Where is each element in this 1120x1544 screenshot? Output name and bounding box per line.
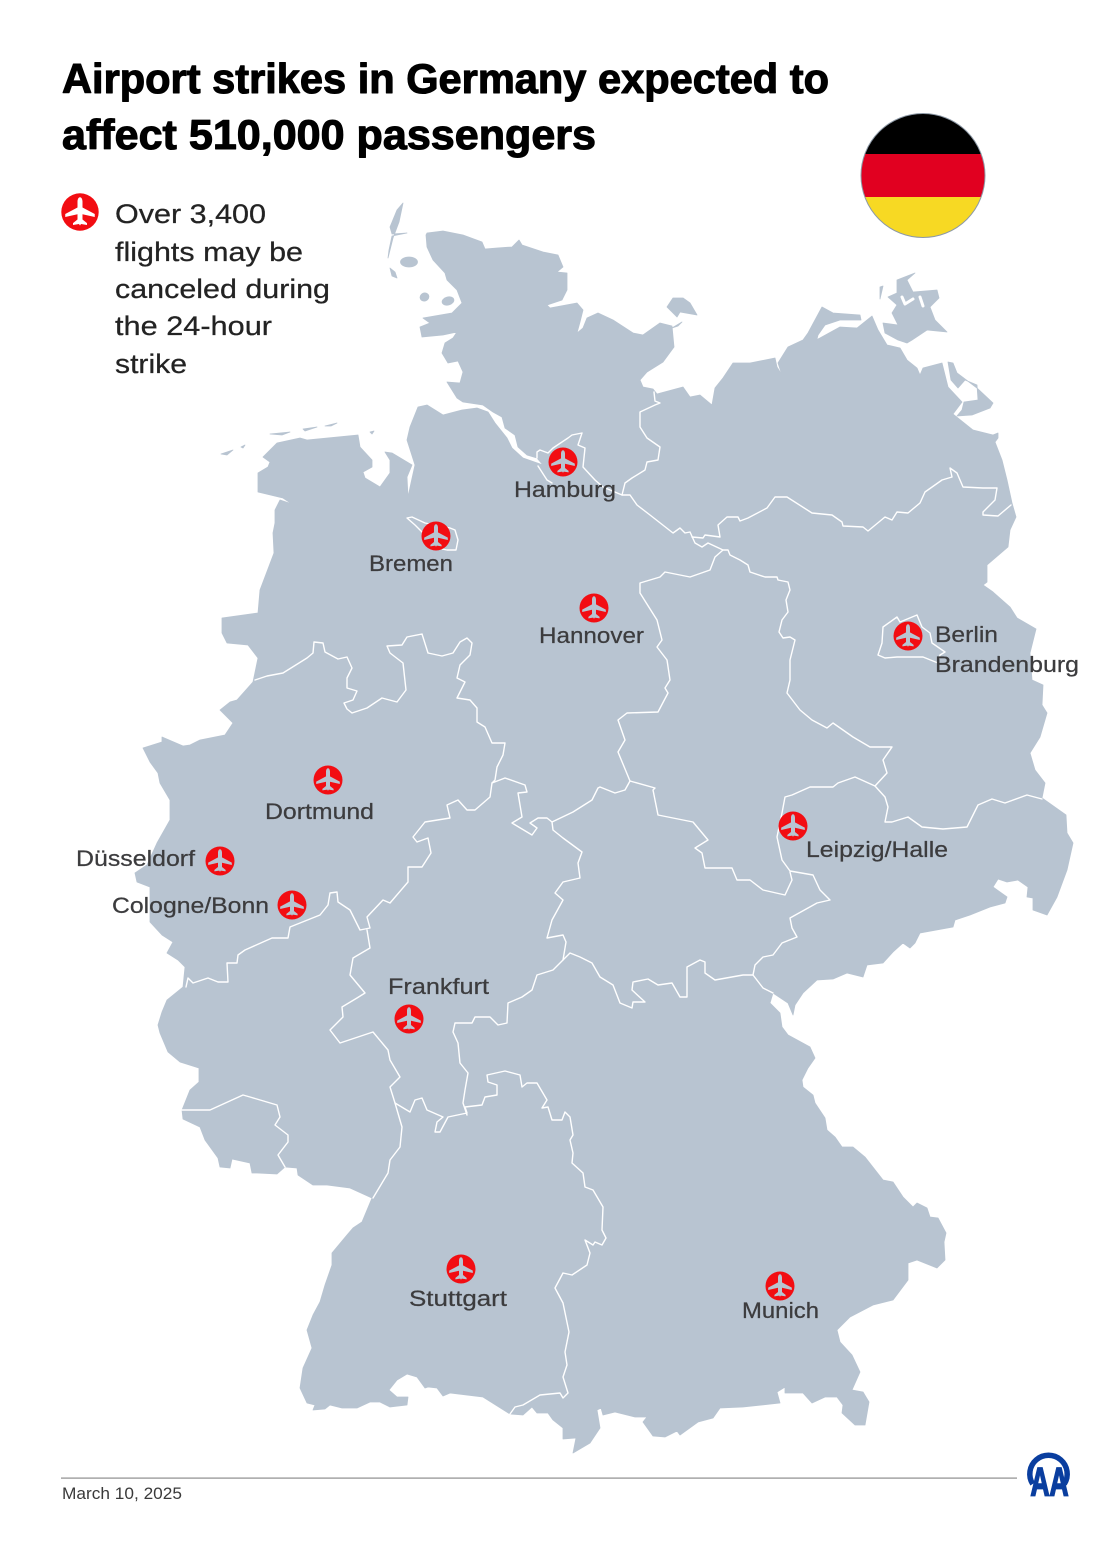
airport: Frankfurt: Frankfurt xyxy=(388,974,490,999)
airport: Düsseldorf xyxy=(76,846,234,876)
state borders xyxy=(182,392,1042,1414)
airport: Düsseldorf: Düsseldorf xyxy=(76,846,196,871)
airport: Hannover xyxy=(539,594,645,648)
airport: Leipzig/Halle: Leipzig/Halle xyxy=(806,837,948,862)
airport: Hamburg xyxy=(514,448,616,502)
title: affect 510,000 passengers xyxy=(62,111,596,158)
logo: Anadolu Agency: AA xyxy=(1030,1460,1068,1504)
legend callout: cancelled flights: strike xyxy=(115,349,187,379)
icon: plane in red circle xyxy=(61,193,99,231)
airport: Cologne/Bonn: Cologne/Bonn xyxy=(112,893,269,918)
airport: Bremen xyxy=(369,522,453,576)
footer rule xyxy=(61,1478,1017,1479)
legend callout: cancelled flights: the 24-hour xyxy=(115,311,272,341)
legend callout: cancelled flights: canceled during xyxy=(115,274,330,304)
airport: Berlin Brandenburg xyxy=(894,622,1079,677)
mainland xyxy=(135,231,1073,1453)
legend callout: cancelled flights: flights may be xyxy=(115,237,303,267)
airport: Hamburg: Hamburg xyxy=(514,477,616,502)
logo: Anadolu Agency xyxy=(1030,1455,1068,1504)
airport: Stuttgart: Stuttgart xyxy=(409,1286,508,1311)
map of Germany xyxy=(135,203,1073,1453)
flag of Germany xyxy=(860,113,986,239)
islands xyxy=(221,203,993,455)
legend callout: cancelled flights: Over 3,400 xyxy=(115,199,266,229)
airport: Frankfurt xyxy=(388,974,490,1034)
airport: Berlin Brandenburg: Brandenburg xyxy=(935,652,1079,677)
airport: Dortmund xyxy=(265,766,374,824)
airport: Munich xyxy=(742,1272,819,1323)
airport: Munich: Munich xyxy=(742,1298,819,1323)
title: Airport strikes in Germany expected to xyxy=(62,55,829,102)
airport: Cologne/Bonn xyxy=(112,890,306,920)
airport: Dortmund: Dortmund xyxy=(265,799,374,824)
airport: Hannover: Hannover xyxy=(539,623,645,648)
date: March 10, 2025 xyxy=(62,1485,182,1503)
title xyxy=(62,55,829,158)
airport: Berlin Brandenburg: Berlin xyxy=(935,622,998,647)
legend callout: cancelled flights xyxy=(61,193,330,379)
airport: Stuttgart xyxy=(409,1254,508,1311)
airport: Bremen: Bremen xyxy=(369,551,453,576)
airport: Leipzig/Halle xyxy=(778,812,948,862)
